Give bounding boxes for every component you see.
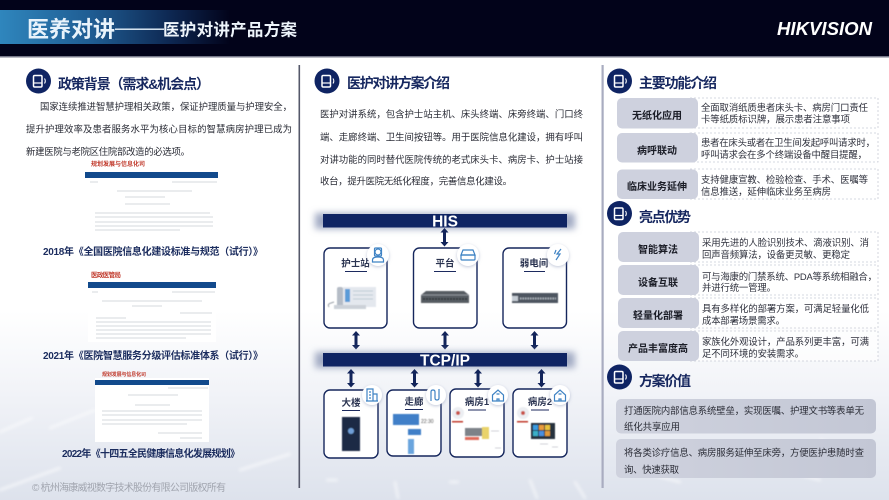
icon badge: building bbox=[362, 385, 382, 405]
card: ward 2 bbox=[513, 385, 570, 457]
card: building bbox=[324, 385, 382, 458]
row: product richness bbox=[618, 331, 878, 361]
panel: policy background bbox=[26, 68, 292, 460]
document 2018: 规划发展与信息化司 bbox=[91, 160, 145, 168]
card: nurse station bbox=[324, 244, 389, 328]
title bbox=[27, 17, 298, 42]
row: paperless bbox=[617, 98, 878, 128]
image: nurse station terminal bbox=[328, 287, 376, 309]
TCP/IP bar bbox=[315, 352, 575, 370]
row: call linkage: 呼叫请求会在多个终端设备中醒目提醒， bbox=[701, 149, 867, 160]
row: clinical extension bbox=[617, 169, 878, 199]
row: clinical extension: 临床业务延伸 bbox=[627, 180, 687, 193]
card: corridor bbox=[387, 385, 446, 456]
card: platform bbox=[414, 244, 479, 328]
heading: 方案价值 bbox=[639, 373, 691, 389]
image: ward 1 devices bbox=[452, 407, 501, 448]
value box two: 将各类诊疗信息、病房服务延伸至床旁，方便医护患随时查 bbox=[624, 447, 865, 458]
icon badge: nurse bbox=[367, 244, 389, 266]
document 2021: 医政医管局 bbox=[91, 270, 122, 279]
architecture diagram bbox=[315, 213, 575, 458]
value box two bbox=[616, 439, 876, 478]
column divider left bbox=[298, 65, 300, 488]
row: clinical extension: 支持健康宣教、检验检查、手术、医嘱等 bbox=[701, 174, 868, 185]
title: 医养对讲 bbox=[27, 17, 115, 42]
icon badge: house bbox=[550, 385, 570, 405]
row: device interconnection bbox=[618, 265, 878, 295]
row: paperless: 卡等纸质标识牌，展示患者注意事项 bbox=[701, 114, 850, 124]
image: ward 2 devices bbox=[517, 407, 558, 447]
heading: 主要功能介绍 bbox=[639, 75, 717, 91]
value box two: 询、快速获取 bbox=[624, 464, 680, 475]
icon badge: transfer arrows bbox=[426, 385, 446, 405]
caption 2018: 2018年《全国医院信息化建设标准与规范（试行）》 bbox=[43, 245, 263, 258]
document 2022 bbox=[95, 371, 209, 442]
document 2021 bbox=[88, 270, 216, 342]
icon: intercom bbox=[607, 201, 632, 226]
HIS bar: HIS bbox=[432, 214, 458, 230]
row: paperless: 无纸化应用 bbox=[632, 109, 682, 122]
title: 医护对讲产品方案 bbox=[163, 20, 298, 40]
body text bbox=[26, 101, 292, 157]
panel: solution value bbox=[607, 364, 876, 478]
card: ward 1 bbox=[450, 385, 508, 457]
body text: 端、走廊终端、卫生间按钮等。用于医院信息化建设，拥有呼叫 bbox=[320, 132, 583, 142]
card: corridor: 走廊 bbox=[404, 396, 424, 408]
document 2022: 规划发展与信息化司 bbox=[102, 371, 146, 378]
row: lightweight deployment: 成本部署场景需求。 bbox=[702, 315, 785, 326]
image: door terminal bbox=[342, 417, 360, 451]
HIS bar bbox=[315, 213, 575, 230]
arrows: row one to TCP/IP bbox=[352, 331, 538, 350]
row: device interconnection: 可与海康的门禁系统、PDA等系统相融合， bbox=[702, 271, 877, 282]
icon: intercom bbox=[607, 68, 632, 94]
card: ward 2: 病房2 bbox=[528, 396, 552, 408]
panel: advantages bbox=[607, 201, 878, 361]
icon badge: server bbox=[457, 244, 479, 266]
TCP/IP bar: TCP/IP bbox=[420, 352, 470, 370]
row: product richness: 家族化外观设计，产品系列更丰富，可满 bbox=[702, 336, 869, 347]
row: paperless: 全面取消纸质患者床头卡、病房门口责任 bbox=[701, 102, 868, 113]
card: ward 1: 病房1 bbox=[465, 396, 490, 408]
row: call linkage: 病呼联动 bbox=[637, 144, 677, 157]
icon: intercom bbox=[26, 68, 51, 94]
row: product richness: 足不同环境的安装需求。 bbox=[702, 348, 804, 359]
header band bbox=[0, 0, 889, 58]
body text: 提升护理效率及患者服务水平为核心目标的智慧病房护理已成为 bbox=[26, 124, 292, 134]
card: weak current room: 弱电间 bbox=[520, 258, 548, 270]
heading: 政策背景（需求&机会点） bbox=[58, 76, 210, 92]
copyright: © 杭州海康威视数字技术股份有限公司版权所有 bbox=[32, 481, 226, 494]
value box one: 打通医院内部信息系统壁垒，实现医嘱、护理文书等表单无 bbox=[624, 405, 864, 416]
panel: main functions bbox=[607, 68, 878, 199]
row: product richness: 产品丰富度高 bbox=[628, 342, 688, 355]
row: clinical extension: 信息推送，延伸临床业务至病房 bbox=[701, 186, 831, 197]
icon badge: house bbox=[488, 385, 508, 405]
body text: 国家连续推进智慧护理相关政策，保证护理质量与护理安全， bbox=[40, 101, 292, 112]
icon badge: plug bbox=[547, 244, 569, 266]
arrows: TCP/IP to row two bbox=[347, 369, 546, 388]
row: call linkage: 患者在床头或者在卫生间发起呼叫请求时， bbox=[701, 137, 875, 148]
heading: 医护对讲方案介绍 bbox=[347, 75, 450, 91]
row: device interconnection: 设备互联 bbox=[638, 276, 678, 289]
document 2018 bbox=[85, 160, 218, 232]
value box one bbox=[616, 399, 876, 434]
arrow: HIS to platform bbox=[440, 228, 448, 246]
icon: intercom bbox=[314, 68, 340, 94]
card: building: 大楼 bbox=[341, 397, 361, 409]
body text: 对讲功能的同时替代医院传统的老式床头卡、病房卡、护士站接 bbox=[320, 154, 584, 165]
body text bbox=[320, 108, 584, 186]
icon: intercom bbox=[607, 364, 632, 390]
card: nurse station: 护士站 bbox=[341, 258, 370, 270]
value box one: 纸化共享应用 bbox=[624, 421, 680, 432]
image: corridor display: 22:30 bbox=[421, 419, 434, 425]
image: network switch bbox=[512, 293, 558, 303]
row: smart algorithm bbox=[618, 232, 878, 262]
row: smart algorithm: 采用先进的人脸识别技术、滴液识别、消 bbox=[702, 237, 869, 248]
image: server bbox=[421, 291, 469, 303]
body text: 收台，提升医院无纸化程度，完善信息化建设。 bbox=[320, 176, 512, 186]
heading: 亮点优势 bbox=[639, 209, 691, 225]
row: smart algorithm: 智能算法 bbox=[638, 243, 678, 256]
row: smart algorithm: 回声音频算法，设备更灵敏、更稳定 bbox=[702, 249, 850, 260]
body text: 新建医院与老院区住院部改造的必选项。 bbox=[26, 146, 190, 157]
card: platform: 平台 bbox=[435, 258, 455, 270]
logo: Hikvision: HIKVISION bbox=[777, 19, 873, 39]
caption 2022: 2022年《十四五全民健康信息化发展规划》 bbox=[62, 447, 240, 460]
row: lightweight deployment: 具有多样化的部署方案，可满足轻量化低 bbox=[702, 303, 870, 314]
row: lightweight deployment bbox=[618, 298, 878, 328]
panel: solution introduction bbox=[314, 68, 584, 186]
caption 2021: 2021年《医院智慧服务分级评估标准体系（试行）》 bbox=[43, 349, 263, 362]
card: weak current room bbox=[503, 244, 569, 328]
row: call linkage bbox=[617, 133, 878, 162]
row: lightweight deployment: 轻量化部署 bbox=[633, 309, 683, 322]
background light streaks bbox=[0, 410, 870, 498]
row: device interconnection: 并进行统一管理。 bbox=[702, 282, 776, 293]
column divider right bbox=[602, 65, 604, 488]
body text: 医护对讲系统，包含护士站主机、床头终端、床旁终端、门口终 bbox=[320, 108, 584, 120]
